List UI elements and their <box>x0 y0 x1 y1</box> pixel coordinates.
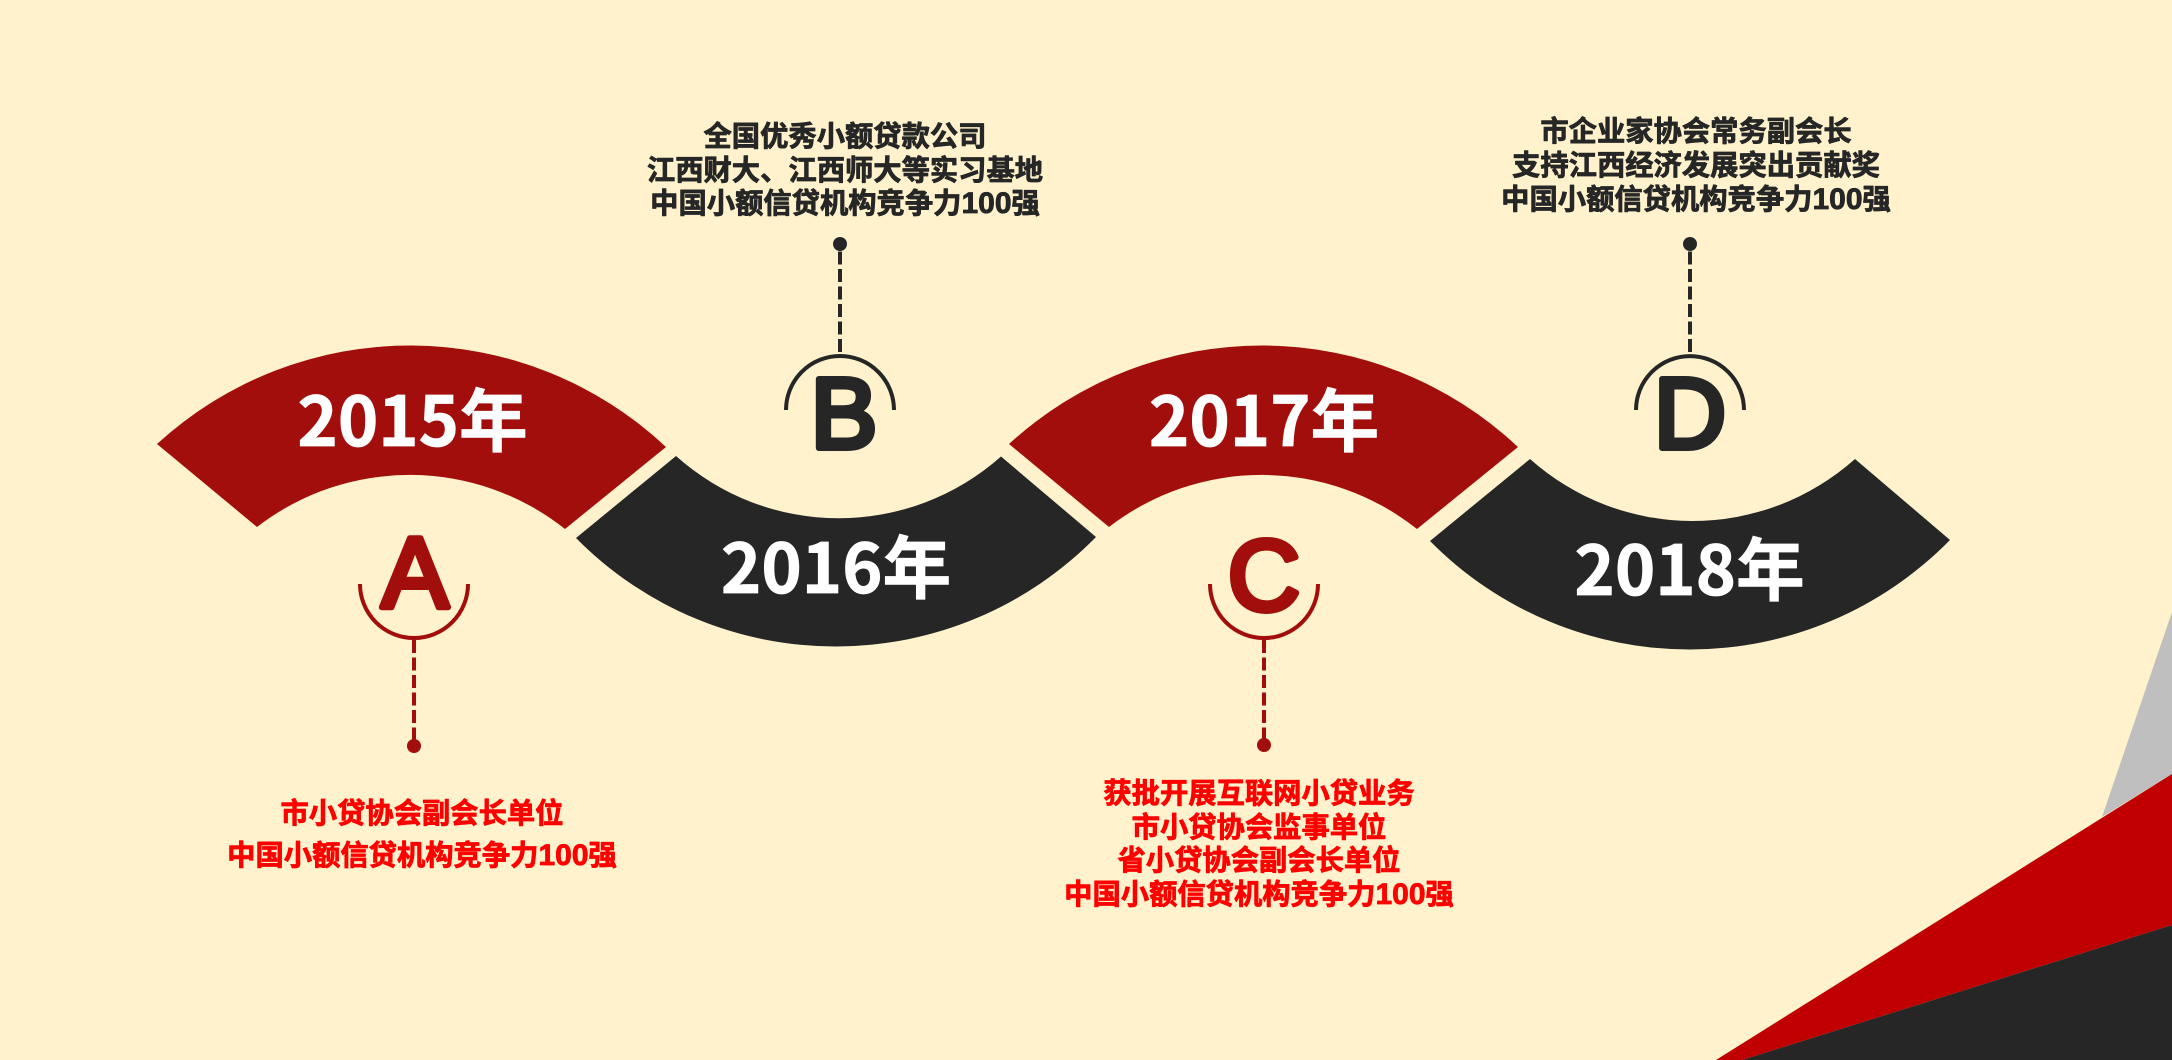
marker B: B <box>811 358 877 470</box>
marker A <box>360 517 468 753</box>
marker C <box>1210 520 1318 752</box>
marker B <box>786 237 894 470</box>
segment 2015 <box>157 346 666 529</box>
caption C: 省小贷协会副会长单位 <box>1118 844 1400 876</box>
segment 2018: 2018年 <box>1574 516 1805 615</box>
caption A: 中国小额信贷机构竞争力100强 <box>227 839 617 872</box>
corner decoration <box>1716 612 2172 1060</box>
marker D <box>1636 237 1744 470</box>
caption C: 市小贷协会监事单位 <box>1132 811 1386 843</box>
caption B: 全国优秀小额贷款公司 <box>704 120 986 152</box>
segment 2017: 2017年 <box>1149 367 1379 466</box>
segment 2017 <box>1009 346 1518 529</box>
caption A <box>227 797 617 872</box>
segment 2016 <box>576 456 1096 646</box>
caption D: 中国小额信贷机构竞争力100强 <box>1501 183 1891 216</box>
caption C <box>1064 777 1454 911</box>
caption D <box>1501 115 1891 216</box>
marker A: A <box>382 517 449 629</box>
marker C: C <box>1228 520 1300 632</box>
caption D: 支持江西经济发展突出贡献奖 <box>1512 149 1880 181</box>
marker D: D <box>1654 358 1726 470</box>
caption B: 中国小额信贷机构竞争力100强 <box>650 187 1040 220</box>
caption A: 市小贷协会副会长单位 <box>281 797 563 829</box>
caption C: 获批开展互联网小贷业务 <box>1103 777 1415 809</box>
caption B: 江西财大、江西师大等实习基地 <box>647 154 1043 186</box>
caption C: 中国小额信贷机构竞争力100强 <box>1064 878 1454 911</box>
segment 2015: 2015年 <box>297 367 528 466</box>
caption D: 市企业家协会常务副会长 <box>1540 115 1852 147</box>
segment 2016: 2016年 <box>721 514 951 613</box>
caption B <box>647 120 1043 220</box>
segment 2018 <box>1430 459 1950 649</box>
